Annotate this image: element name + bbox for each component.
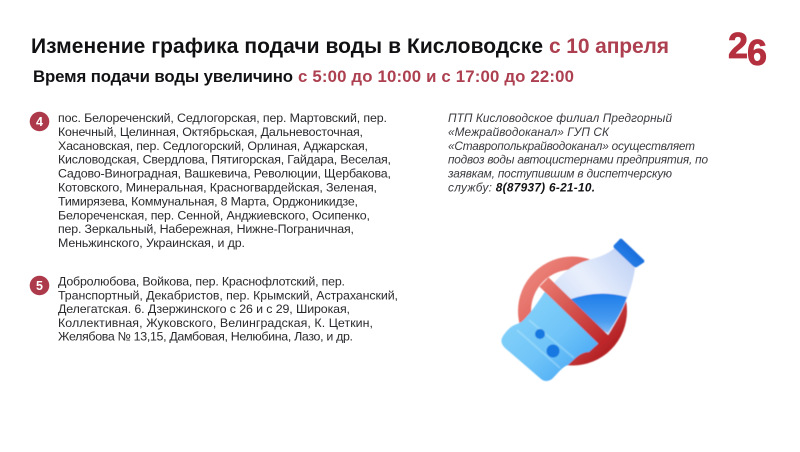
text block: water delivery note: заявкам, поступившим в диспетчерскую [447,166,672,180]
text block: district 5 streets: Добролюбова, Войкова, пер. Краснофлотский, пер. [58,274,345,288]
text block: district 4 streets: Котовского, Минеральная, Красногвардейская, Зеленая, [58,180,377,194]
text block: water delivery note: подвоз воды автоцистернами предприятия, по [448,153,708,167]
text block: district 5 streets: Коллективная, Жуковского, Велинградская, К. Цеткин, [58,316,373,330]
subtitle: с 5:00 до 10:00 и с 17:00 до 22:00 [298,67,574,86]
text block: water delivery note: службу: 8(87937) 6-21-10. [448,181,595,195]
text block: water delivery note [447,111,708,195]
text block: district 5 streets: Желябова № 13,15, Дамбовая, Нелюбина, Лазо, и др. [58,330,353,344]
badge: 4 [30,112,49,131]
logo: 26: 6 [747,32,767,73]
subtitle [33,67,574,86]
text block: district 5 streets: Транспортный, Декабристов, пер. Крымский, Астраханский, [58,288,398,302]
text block: district 4 streets: Меньжинского, Украинская, и др. [58,236,245,250]
icon: crossed-out water bottle [501,239,644,381]
panel: district 5 [30,274,398,344]
title: Изменение графика подачи воды в Кисловодске [31,35,543,58]
logo: 26: 2 [728,25,748,66]
text block: district 5 streets: Делегатская. 6. Дзержинского с 26 и с 29, Широкая, [58,302,350,316]
text block: water delivery note: ПТП Кисловодское филиал Предгорный [448,111,672,125]
text block: district 4 streets: Тимирязева, Коммунальная, 8 Марта, Орджоникидзе, [58,194,358,208]
badge: 5 [30,276,49,295]
badge: 5: 5 [36,279,43,293]
panel: district 4 [30,111,391,250]
badge: 4: 4 [36,115,43,129]
text block: district 4 streets: Хасановская, пер. Седлогорский, Орлиная, Аджарская, [58,139,368,153]
text block: district 4 streets: Садово-Виноградная, Вашкевича, Революции, Щербакова, [58,167,391,181]
text block: district 4 streets: Кисловодская, Свердлова, Пятигорская, Гайдара, Веселая, [58,153,391,167]
text block: district 5 streets [58,274,398,344]
text block: district 4 streets: пер. Зеркальный, Набережная, Нижне-Пограничная, [58,222,354,236]
text block: district 4 streets: пос. Белореченский, Седлогорская, пер. Мартовский, пер. [58,111,387,125]
subtitle: Время подачи воды увеличино [33,67,293,86]
text block: water delivery note: «Межрайводоканал» ГУП СК [448,125,610,139]
title: с 10 апреля [549,35,669,58]
text block: district 4 streets: Белореченская, пер. Сенной, Анджиевского, Осипенко, [58,208,370,222]
text block: district 4 streets [58,111,391,250]
text block: district 4 streets: Конечный, Целинная, Октябрьская, Дальневосточная, [58,125,363,139]
logo: 26 [728,25,767,73]
text block: water delivery note: «Ставрополькрайводоканал» осуществляет [448,139,695,153]
